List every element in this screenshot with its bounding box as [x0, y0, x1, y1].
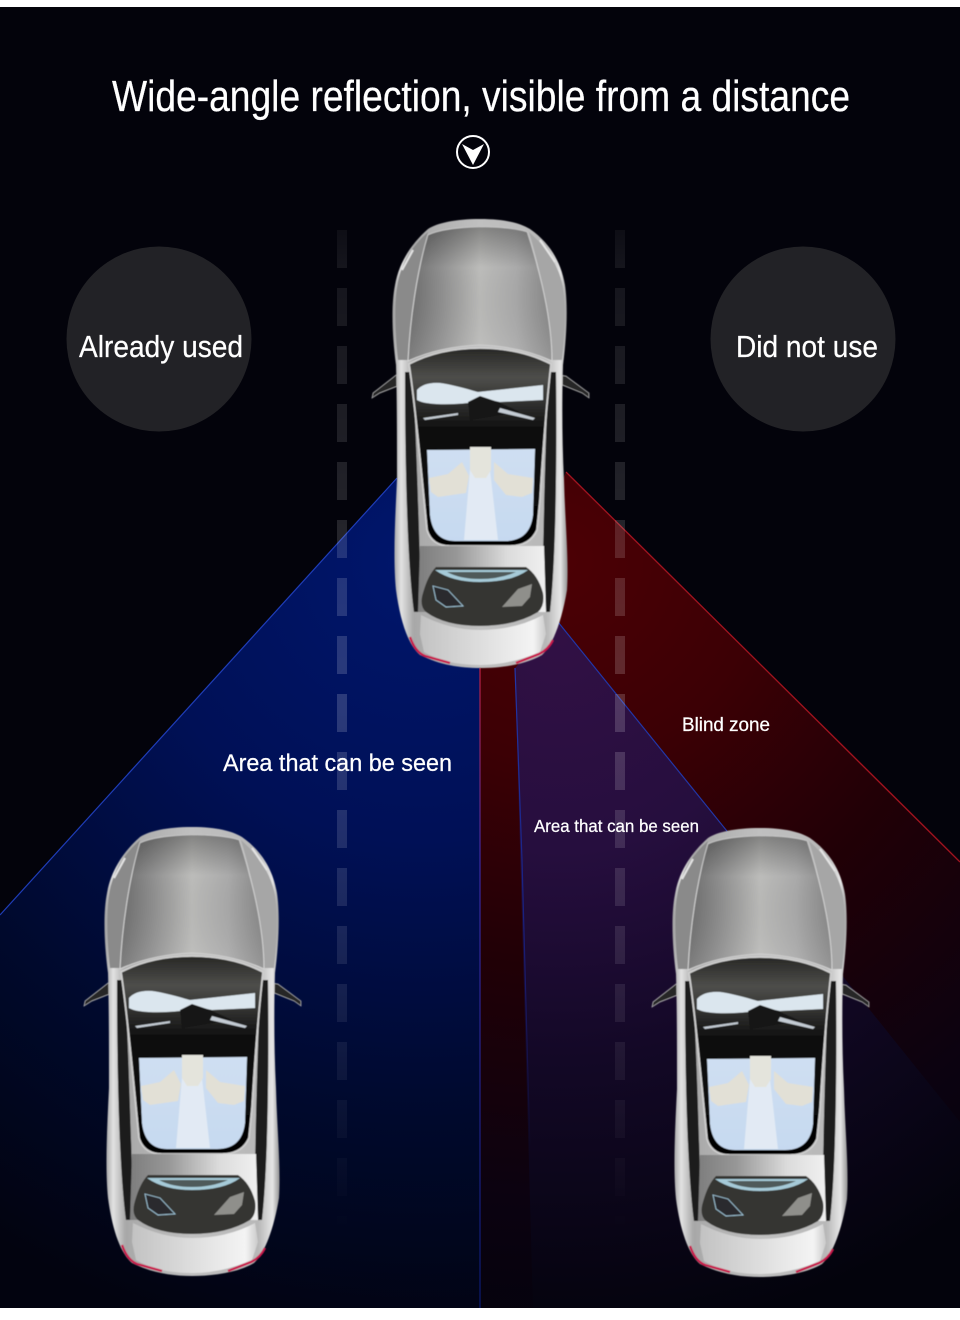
car body — [392, 219, 568, 668]
badge: already used: Already used — [79, 329, 243, 364]
glass canopy — [409, 348, 551, 546]
car: top centre — [372, 219, 589, 668]
cabin floor — [427, 449, 535, 541]
icon: down chevron in circle — [457, 136, 489, 168]
rear deck — [418, 546, 546, 612]
left side dark band — [405, 372, 424, 612]
badge: did not use — [710, 246, 896, 432]
left fender — [395, 232, 428, 360]
label: area that can be seen (blue): Area that can be seen — [223, 750, 452, 777]
title: Wide-angle reflection, visible from a distance — [112, 72, 850, 121]
rear light strip — [435, 570, 528, 582]
left red reflector — [410, 637, 450, 663]
right tail light — [502, 584, 532, 607]
label: area that can be seen (purple): Area that can be seen — [534, 816, 699, 836]
bumper — [420, 615, 546, 665]
right mirror — [560, 375, 589, 398]
red beam: blind zone — [480, 472, 960, 1308]
badge: already used — [66, 246, 252, 432]
console — [464, 470, 498, 540]
right red reflector — [516, 640, 553, 663]
dash highlight — [423, 408, 535, 420]
right fender — [529, 232, 565, 360]
left lane dashes — [337, 230, 347, 1230]
right lane dashes — [615, 230, 625, 1230]
left mirror — [372, 375, 401, 398]
purple beam: area that can be seen — [515, 622, 960, 1308]
windscreen reflection — [417, 383, 543, 404]
fender highlights — [402, 240, 555, 270]
left seat — [429, 462, 469, 497]
dashboard silhouette — [468, 396, 520, 420]
label: blind zone: Blind zone — [682, 714, 770, 736]
car: bottom right — [652, 828, 869, 1277]
centre beam line — [479, 668, 481, 1308]
badge: did not use: Did not use — [736, 329, 878, 364]
hood — [408, 227, 552, 361]
car: bottom left — [84, 827, 301, 1276]
right seat — [494, 462, 533, 497]
rear headrest — [470, 447, 491, 478]
right side dark band — [540, 372, 556, 612]
rear window — [422, 567, 543, 626]
hood shading — [408, 227, 552, 361]
blue beam: area that can be seen — [0, 478, 480, 1308]
left tail light — [433, 586, 463, 607]
